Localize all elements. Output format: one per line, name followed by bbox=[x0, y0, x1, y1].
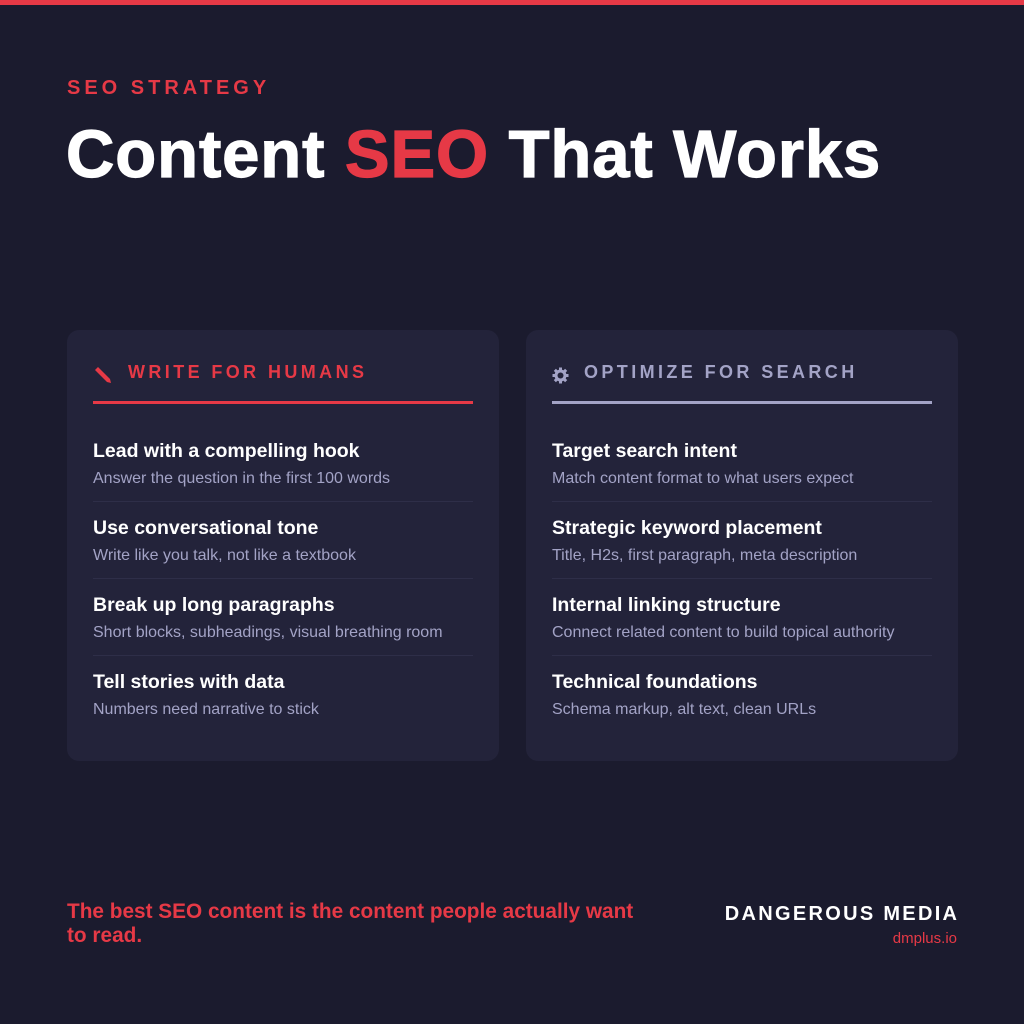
item 4: Numbers need narrative to stick bbox=[93, 701, 319, 718]
item 2 bbox=[93, 502, 473, 579]
brand block bbox=[725, 903, 959, 947]
item 1: Lead with a compelling hook bbox=[93, 440, 360, 462]
item 4 bbox=[552, 671, 816, 718]
item 1 bbox=[93, 425, 473, 502]
item 2: Strategic keyword placement bbox=[552, 517, 822, 539]
item 3 bbox=[552, 579, 932, 656]
item 4 bbox=[93, 671, 319, 718]
item 3: Break up long paragraphs bbox=[93, 594, 335, 616]
item 1: Match content format to what users expect bbox=[552, 470, 853, 487]
item 2 bbox=[552, 502, 932, 579]
brand block: DANGEROUS MEDIA bbox=[725, 903, 959, 925]
panel: optimize for search bbox=[526, 330, 958, 761]
heading: OPTIMIZE FOR SEARCH bbox=[584, 362, 858, 382]
icon: gear bbox=[552, 368, 568, 384]
item 2: Title, H2s, first paragraph, meta description bbox=[552, 547, 857, 564]
top accent bar bbox=[0, 0, 1024, 5]
item 3: Short blocks, subheadings, visual breathing room bbox=[93, 624, 443, 641]
item 4: Schema markup, alt text, clean URLs bbox=[552, 701, 816, 718]
item 3: Connect related content to build topical authority bbox=[552, 624, 894, 641]
item 1 bbox=[552, 425, 932, 502]
item 2: Write like you talk, not like a textbook bbox=[93, 547, 356, 564]
footer tagline: The best SEO content is the content people actually want to read. bbox=[67, 900, 633, 947]
item 4: Technical foundations bbox=[552, 671, 757, 693]
item 3: Internal linking structure bbox=[552, 594, 781, 616]
brand block: dmplus.io bbox=[893, 930, 957, 947]
item 2: Use conversational tone bbox=[93, 517, 318, 539]
heading: WRITE FOR HUMANS bbox=[128, 362, 367, 382]
icon: pencil bbox=[95, 367, 111, 383]
title: Content SEO That Works bbox=[66, 117, 881, 192]
eyebrow label: SEO STRATEGY bbox=[67, 77, 270, 99]
item 1: Target search intent bbox=[552, 440, 737, 462]
item 1: Answer the question in the first 100 words bbox=[93, 470, 390, 487]
item 4: Tell stories with data bbox=[93, 671, 284, 693]
panel: write for humans bbox=[67, 330, 499, 761]
item 3 bbox=[93, 579, 473, 656]
